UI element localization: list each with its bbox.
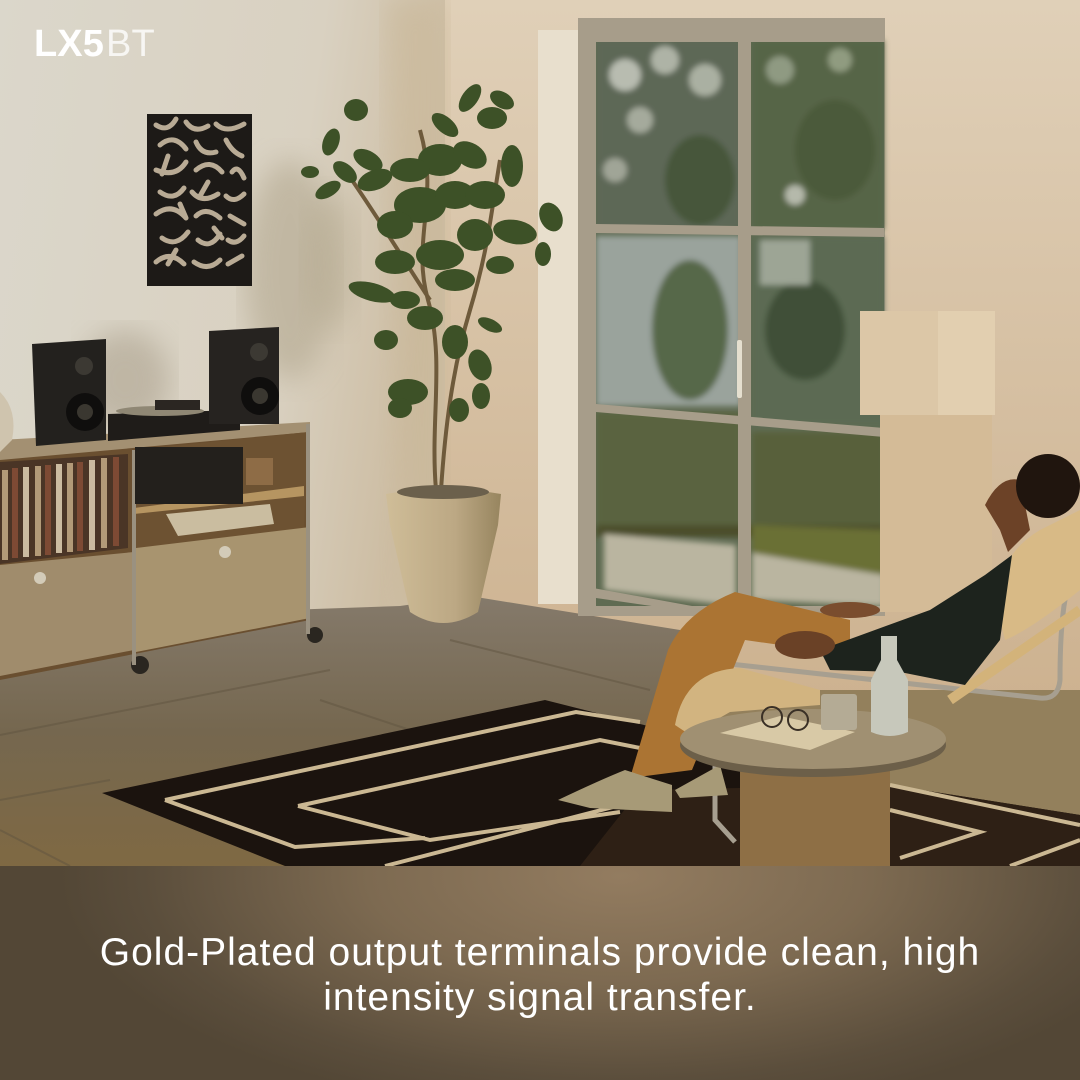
side table xyxy=(680,636,946,866)
plant xyxy=(301,80,567,490)
walls xyxy=(0,0,1080,700)
turntable xyxy=(108,400,240,441)
chair frame xyxy=(715,575,1072,842)
amplifier xyxy=(135,447,243,504)
bottle xyxy=(871,636,908,736)
head xyxy=(985,479,1030,552)
glasses xyxy=(762,707,808,730)
pot xyxy=(386,485,501,623)
records xyxy=(0,454,128,564)
logo: LX5BT xyxy=(34,23,155,65)
glass xyxy=(821,694,857,730)
rug xyxy=(102,700,1080,866)
sculpture xyxy=(0,392,14,452)
media cabinet xyxy=(0,422,323,680)
book xyxy=(720,716,855,750)
lamp column xyxy=(860,311,995,612)
caption text: Gold-Plated output terminals provide clean, high intensity signal transfer. xyxy=(100,931,980,1019)
legs xyxy=(630,592,850,778)
floor xyxy=(0,596,1080,866)
window xyxy=(578,18,885,618)
artwork xyxy=(147,114,252,286)
speakers xyxy=(32,327,279,446)
caption band xyxy=(0,866,1080,1080)
reclining man xyxy=(558,454,1080,842)
shoes xyxy=(558,770,672,812)
hands xyxy=(775,631,835,659)
torso xyxy=(820,555,1012,685)
stacked books xyxy=(166,504,274,536)
